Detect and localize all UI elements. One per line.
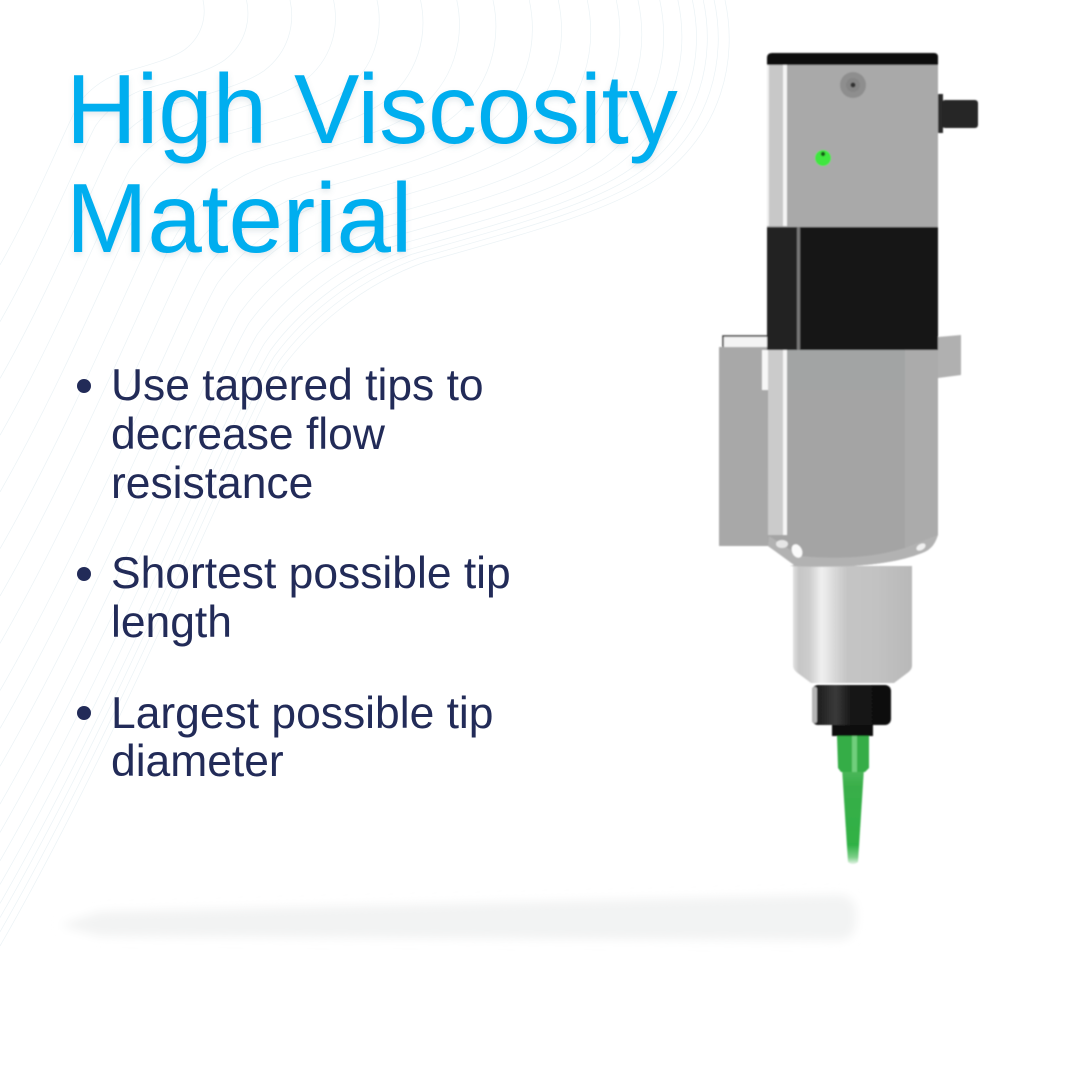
bullet 1: tapered tips bbox=[77, 361, 484, 508]
main valve body bbox=[762, 350, 938, 567]
silver cylinder bbox=[793, 566, 912, 683]
green status LED bbox=[815, 150, 831, 166]
floor shadow bbox=[60, 895, 856, 940]
bullet 1: tapered tips: resistance bbox=[111, 459, 313, 508]
black top cap bbox=[767, 53, 938, 65]
black motor block bbox=[767, 226, 938, 350]
title: Material bbox=[66, 163, 412, 273]
side connector bbox=[938, 94, 978, 133]
title bbox=[66, 54, 678, 273]
bullet 3: largest tip diameter: diameter bbox=[111, 737, 284, 786]
bullet list bbox=[77, 361, 511, 786]
bullet 2: shortest tip length bbox=[77, 549, 511, 647]
bullet 2: shortest tip length: Shortest possible tip bbox=[111, 549, 511, 598]
background: flowing contour lines bbox=[0, 0, 729, 946]
bullet 1: tapered tips: Use tapered tips to bbox=[111, 361, 484, 410]
black collar and nut bbox=[812, 685, 891, 736]
bullet 1: tapered tips: decrease flow bbox=[111, 410, 386, 459]
bullet 3: largest tip diameter bbox=[77, 689, 493, 786]
green dispensing tip bbox=[837, 736, 869, 864]
title: High Viscosity bbox=[66, 54, 678, 164]
bullet 2: shortest tip length: length bbox=[111, 598, 232, 647]
dispensing valve product illustration bbox=[719, 53, 978, 864]
side bracket bbox=[719, 335, 961, 546]
screw bbox=[840, 72, 866, 98]
bullet 3: largest tip diameter: Largest possible tip bbox=[111, 689, 493, 738]
upper grey housing bbox=[767, 60, 938, 227]
